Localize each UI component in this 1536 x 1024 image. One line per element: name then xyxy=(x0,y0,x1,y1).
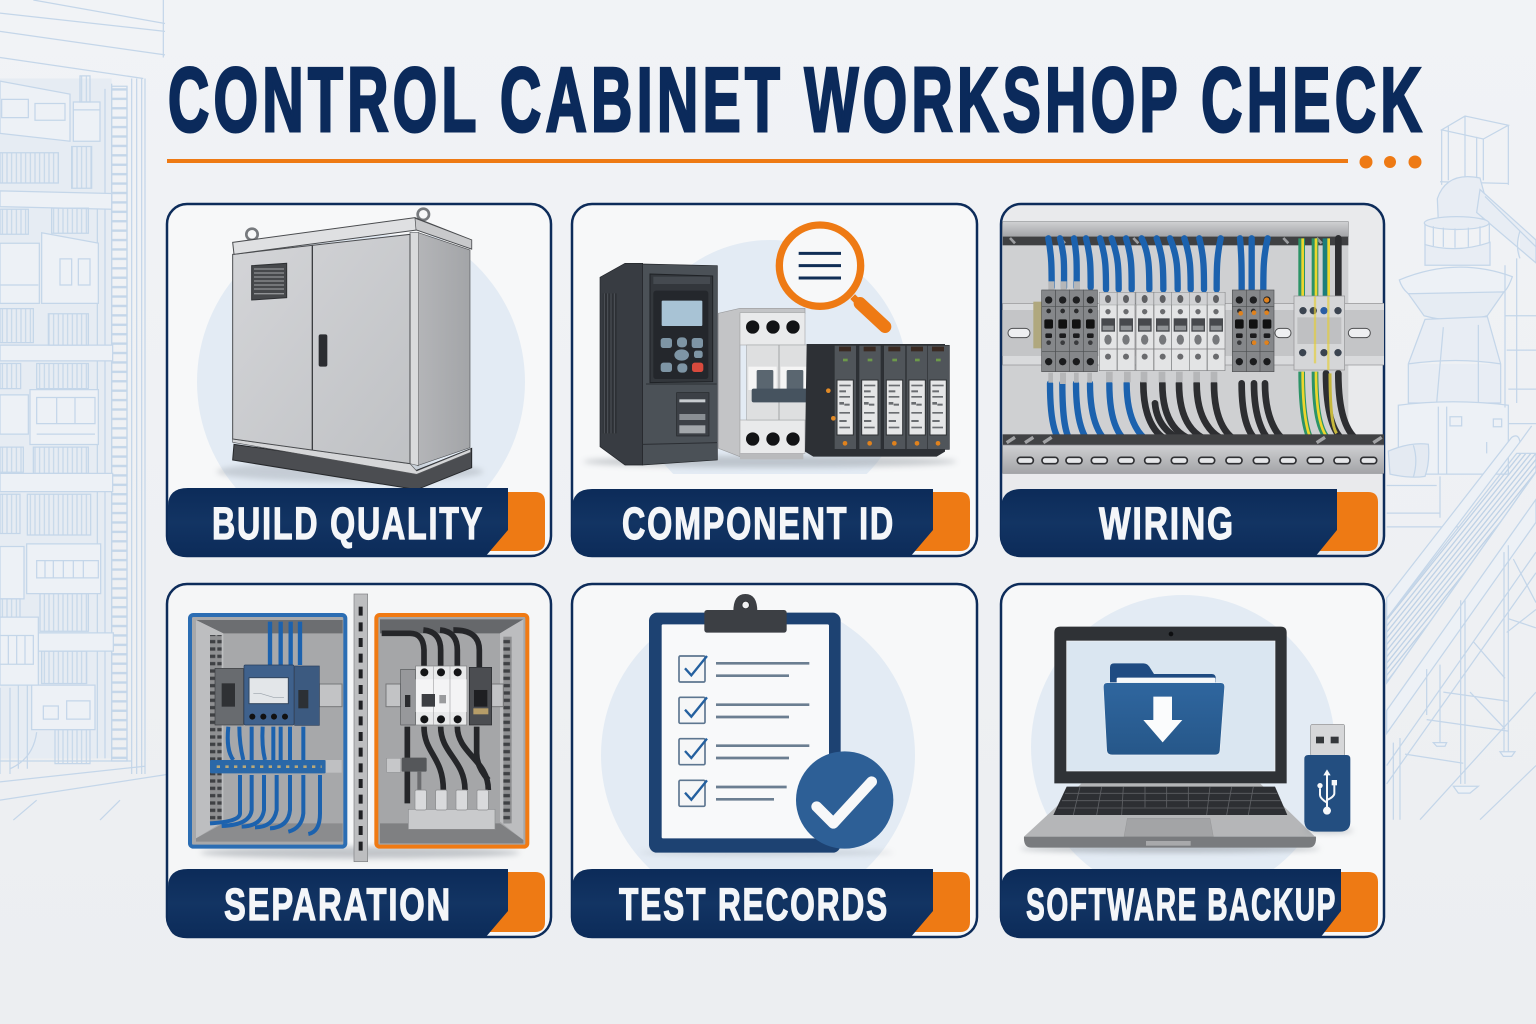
orange enclosure xyxy=(376,615,527,847)
title underline with dots xyxy=(167,156,1422,168)
panel: separation xyxy=(167,584,551,938)
banner xyxy=(168,488,508,557)
label: BUILD QUALITY xyxy=(212,498,484,549)
panel: build quality xyxy=(167,204,551,557)
banner xyxy=(1001,489,1337,557)
icon: background circle xyxy=(664,240,903,474)
label: TEST RECORDS xyxy=(619,879,889,930)
blue enclosure xyxy=(190,615,345,847)
orange tab xyxy=(488,492,545,551)
panel: wiring xyxy=(1001,204,1384,557)
banner xyxy=(572,489,933,557)
orange tab xyxy=(915,872,970,932)
orange tab xyxy=(915,492,970,551)
illustration: separated enclosures xyxy=(190,594,527,862)
icon: background circle xyxy=(601,622,915,869)
illustration: steel cabinet xyxy=(217,209,483,490)
label: COMPONENT ID xyxy=(622,498,895,549)
label: WIRING xyxy=(1099,498,1235,549)
panel: software backup xyxy=(1001,584,1384,938)
illustration: din rail wiring xyxy=(1003,222,1384,473)
icon: background circle xyxy=(1031,595,1333,869)
orange tab xyxy=(1318,492,1378,551)
divider rail xyxy=(354,594,368,862)
banner xyxy=(572,869,933,938)
background sketch: cabinet interior xyxy=(0,0,170,820)
icon: clipboard checklist xyxy=(640,594,893,855)
icon: check badge xyxy=(796,751,893,849)
banner xyxy=(1001,869,1341,938)
illustration: drive, breaker, modules xyxy=(583,263,957,468)
label: SOFTWARE BACKUP xyxy=(1026,879,1337,930)
panel: test records xyxy=(572,584,977,938)
banner xyxy=(168,869,508,938)
icon: background circle xyxy=(197,235,525,488)
panel: component id xyxy=(572,204,977,557)
label: SEPARATION xyxy=(224,879,452,930)
background sketch: industrial tower and conveyor xyxy=(1387,116,1536,820)
icon: magnifying glass xyxy=(779,225,885,327)
orange tab xyxy=(488,872,545,932)
icon: usb drive xyxy=(1303,724,1353,833)
orange tab xyxy=(1322,872,1378,932)
icon: laptop with folder xyxy=(1020,627,1320,853)
